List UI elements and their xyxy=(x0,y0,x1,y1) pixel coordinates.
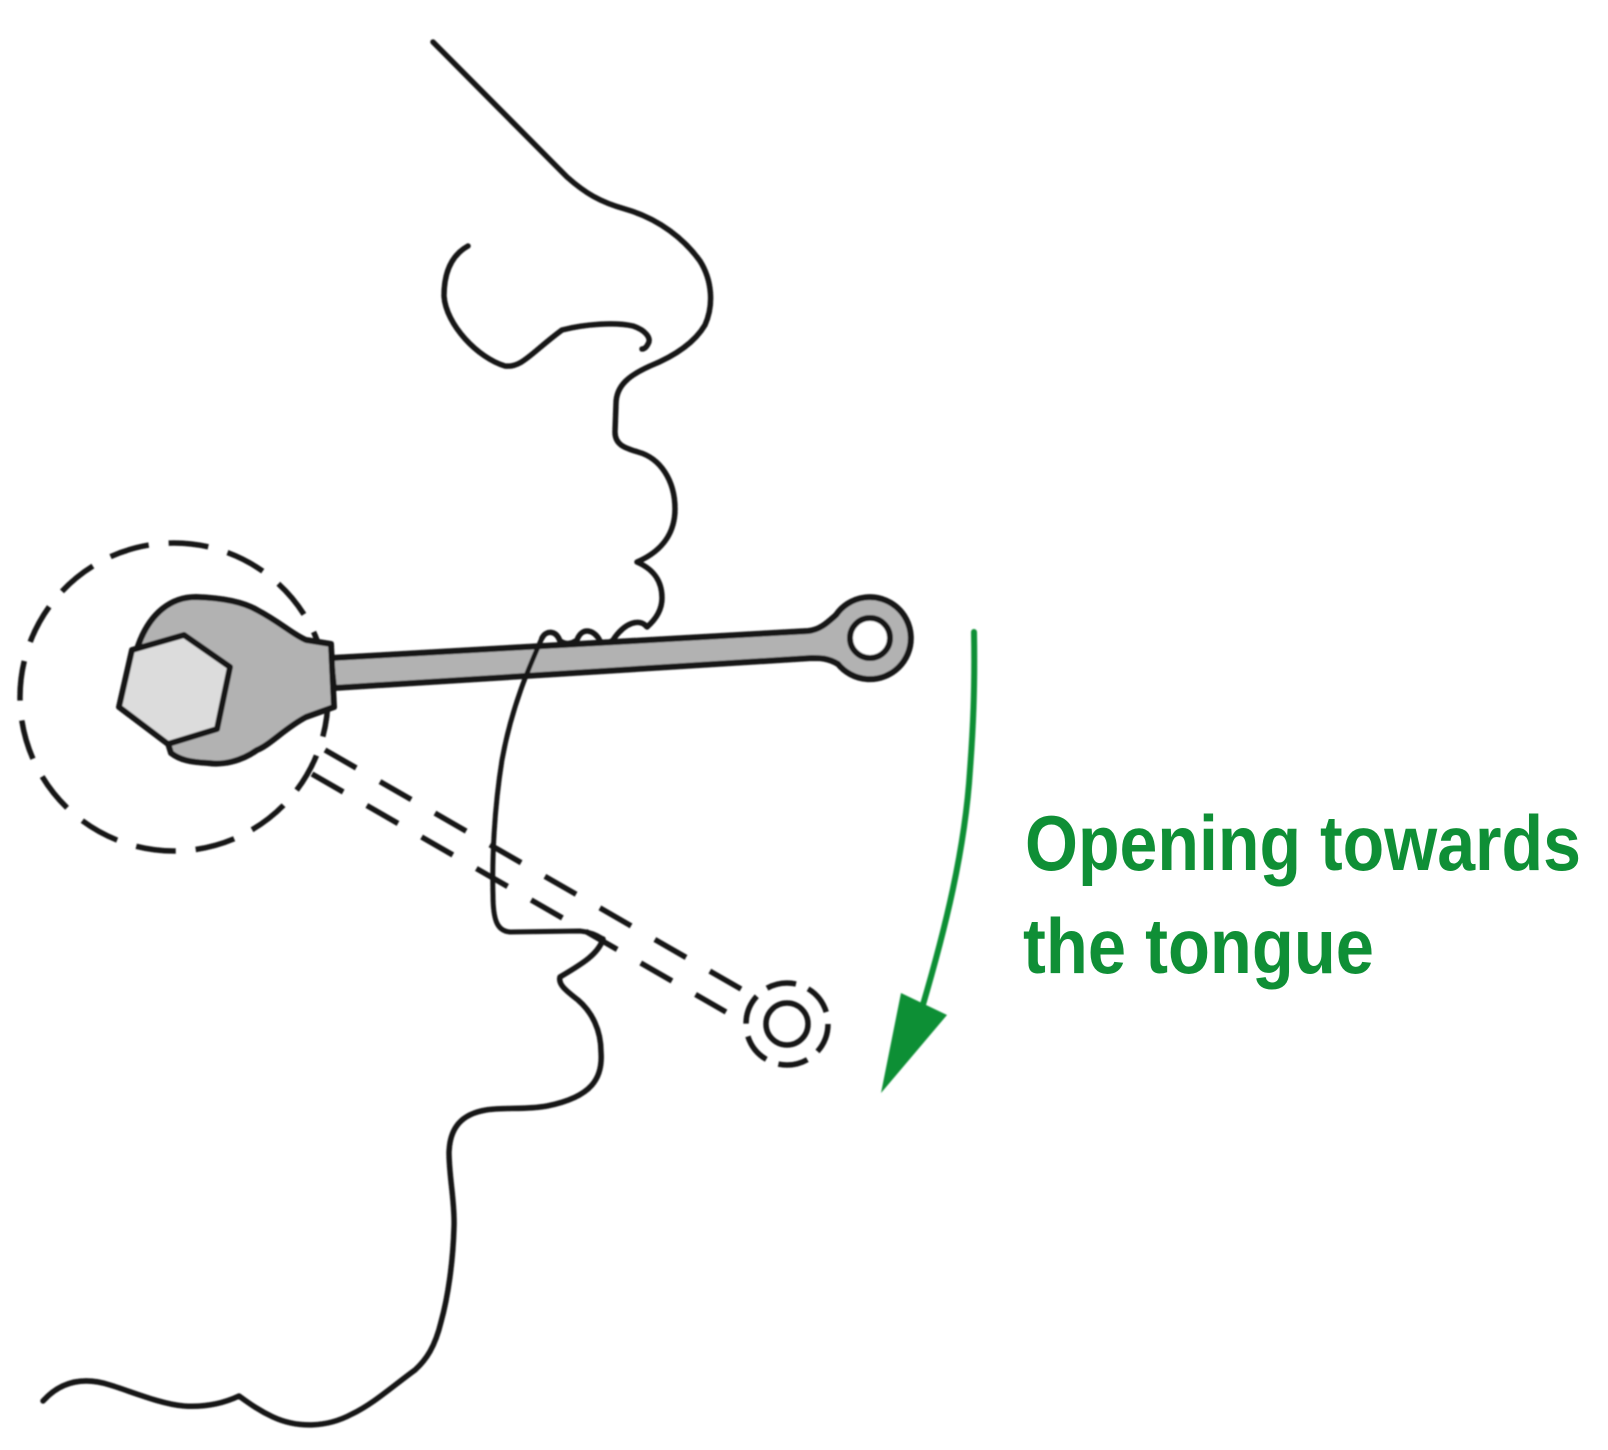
face profile: forehead, nose and upper lip xyxy=(433,42,711,644)
wrench: closed position with head and ring xyxy=(119,597,911,764)
inner lip line crossing the wrench xyxy=(493,638,603,939)
dashed wrench: open position xyxy=(312,750,828,1065)
arrow: opening direction xyxy=(881,632,974,1093)
label: opening towards the tongue xyxy=(1023,799,1581,990)
icon: hexagonal screw head xyxy=(119,635,230,744)
dashed circle: rotation area around the screw xyxy=(20,543,328,851)
face profile: chin and neck xyxy=(43,939,603,1425)
label: opening towards the tongue: the tongue xyxy=(1023,902,1374,990)
